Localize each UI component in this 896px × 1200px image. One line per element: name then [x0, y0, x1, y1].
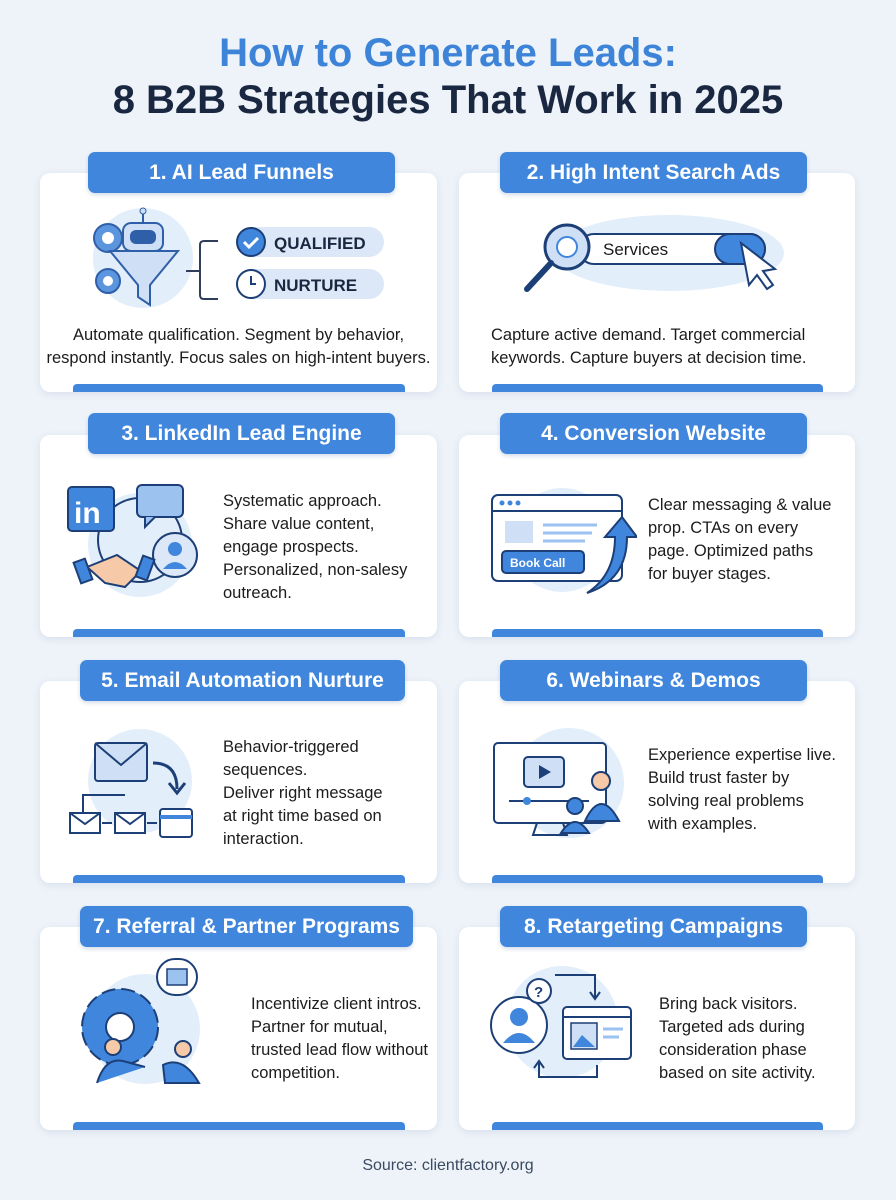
text block: keywords. Capture buyers at decision time. — [491, 349, 806, 367]
text block: outreach. — [223, 584, 292, 602]
panel: 3 LinkedIn Lead Engine — [40, 435, 437, 637]
icon: linkedin network: in — [74, 497, 101, 530]
panel: 8 Retargeting Campaigns — [459, 927, 855, 1130]
icon: gear handshake — [81, 958, 201, 1084]
icon: webinar screen — [493, 728, 624, 838]
text block: Personalized, non-salesy — [223, 561, 407, 579]
text block: Build trust faster by — [648, 769, 789, 787]
heading tab 4: 4. Conversion Website — [541, 422, 766, 445]
text block: based on site activity. — [659, 1064, 816, 1082]
title line 1: How to Generate Leads: — [219, 31, 677, 75]
heading tab 1 — [88, 152, 395, 193]
heading tab 4 — [500, 413, 807, 454]
text block: for buyer stages. — [648, 565, 771, 583]
text block — [648, 496, 831, 583]
heading tab 5: 5. Email Automation Nurture — [101, 669, 384, 692]
text block: competition. — [251, 1064, 340, 1082]
source footer: Source: clientfactory.org — [362, 1157, 534, 1174]
heading tab 7 — [80, 906, 413, 947]
text block: prop. CTAs on every — [648, 519, 798, 537]
text block: engage prospects. — [223, 538, 359, 556]
text block: Share value content, — [223, 515, 374, 533]
text block: solving real problems — [648, 792, 804, 810]
text block: Deliver right message — [223, 784, 383, 802]
text block: page. Optimized paths — [648, 542, 813, 560]
text block: respond instantly. Focus sales on high-intent buyers. — [46, 349, 430, 367]
text block: Incentivize client intros. — [251, 995, 422, 1013]
panel: 6 Webinars & Demos — [459, 681, 855, 883]
text block: Behavior-triggered — [223, 738, 359, 756]
icon: linkedin network — [67, 484, 198, 597]
panel: 1 AI Lead Funnels — [40, 173, 437, 392]
panel: 2 High Intent Search Ads — [459, 173, 855, 392]
text block — [223, 738, 383, 848]
title line 2: 8 B2B Strategies That Work in 2025 — [113, 78, 783, 122]
text block: with examples. — [648, 815, 757, 833]
heading tab 6 — [500, 660, 807, 701]
text block: Clear messaging & value — [648, 496, 831, 514]
text block: Targeted ads during — [659, 1018, 805, 1036]
icon: funnel robot: NURTURE — [274, 276, 357, 295]
text block — [659, 995, 816, 1082]
heading tab 2: 2. High Intent Search Ads — [527, 161, 780, 184]
icon: funnel robot — [93, 208, 384, 308]
text block: trusted lead flow without — [251, 1041, 428, 1059]
icon: browser with CTA: Book Call — [510, 556, 565, 570]
text block: Capture active demand. Target commercial — [491, 326, 805, 344]
heading tab 3 — [88, 413, 395, 454]
text block: Experience expertise live. — [648, 746, 836, 764]
text block: consideration phase — [659, 1041, 807, 1059]
text block: at right time based on — [223, 807, 382, 825]
icon: search bar — [524, 215, 784, 292]
text block: sequences. — [223, 761, 307, 779]
text block: Systematic approach. — [223, 492, 382, 510]
icon: browser with CTA — [491, 488, 637, 594]
heading tab 8: 8. Retargeting Campaigns — [524, 915, 783, 938]
heading tab 3: 3. LinkedIn Lead Engine — [121, 422, 362, 445]
panel: 7 Referral & Partner Programs — [40, 927, 437, 1130]
heading tab 8 — [500, 906, 807, 947]
text block — [491, 326, 806, 367]
icon: email flow — [69, 729, 193, 838]
icon: retargeting loop — [490, 966, 632, 1078]
heading tab 6: 6. Webinars & Demos — [546, 669, 761, 692]
text block: interaction. — [223, 830, 304, 848]
text block: Automate qualification. Segment by behavior, — [73, 326, 404, 344]
text block — [46, 326, 430, 367]
icon: search bar: Services — [603, 240, 668, 259]
heading tab 1: 1. AI Lead Funnels — [149, 161, 334, 184]
icon: funnel robot: QUALIFIED — [274, 234, 366, 253]
text block — [648, 746, 836, 833]
heading tab 5 — [80, 660, 405, 701]
text block: Bring back visitors. — [659, 995, 797, 1013]
text block — [223, 492, 408, 602]
icon: retargeting loop: ? — [534, 984, 543, 1001]
panel: 5 Email Automation Nurture — [40, 681, 437, 883]
text block — [251, 995, 428, 1082]
panel: 4 Conversion Website — [459, 435, 855, 637]
heading tab 2 — [500, 152, 807, 193]
text block: Partner for mutual, — [251, 1018, 388, 1036]
heading tab 7: 7. Referral & Partner Programs — [93, 915, 400, 938]
